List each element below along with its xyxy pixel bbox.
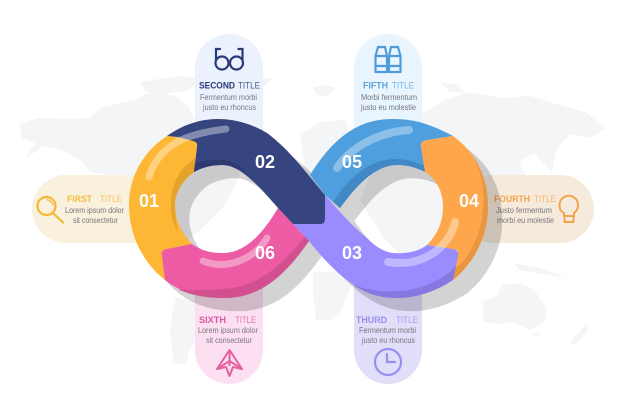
segment 02: navy <box>167 119 325 224</box>
panel: fifth title <box>354 34 422 150</box>
text: third body: Fermentum morbi <box>359 326 416 335</box>
world map background <box>20 74 606 365</box>
panel: fourth title <box>460 175 594 243</box>
icon: light bulb <box>560 196 578 222</box>
heading: second title: SECOND <box>199 80 235 90</box>
text: first body: Lorem ipsum dolor <box>65 206 124 215</box>
heading: fourth title: FOURTH <box>494 194 530 204</box>
text: third body: justo eu rhoncus <box>361 336 415 345</box>
segment 03: purple <box>293 195 458 298</box>
segment 05: blue <box>310 119 453 208</box>
icon: paper plane <box>217 350 242 376</box>
text: sixth body: Lorem ipsum dolor <box>198 326 258 335</box>
number 05: 05 <box>342 152 362 172</box>
text: fifth body: Morbi fermentum <box>361 93 417 102</box>
number 04: 04 <box>459 191 479 211</box>
segment 04: orange <box>421 136 488 280</box>
number 02: 02 <box>255 152 275 172</box>
text: sixth body: sit consectetur <box>206 336 252 345</box>
panel: third title <box>354 270 422 384</box>
panel: first title <box>32 175 172 243</box>
heading: sixth title: SIXTH <box>199 315 226 325</box>
panel: fifth title: TITLE <box>392 80 414 90</box>
panel: sixth title: TITLE <box>235 315 256 325</box>
icon: magnifier <box>38 197 63 222</box>
text: fourth body: morbi eu molestie <box>497 216 554 225</box>
segment 06: pink <box>162 208 309 298</box>
text: fifth body: justo eu molestie <box>360 103 417 112</box>
number 03: 03 <box>342 243 362 263</box>
infinity drop shadow <box>143 132 502 311</box>
text: first body: sit consectetur <box>73 216 118 225</box>
panel: third title: TITLE <box>396 315 418 325</box>
panel: second title: TITLE <box>238 80 260 90</box>
heading: first title: FIRST <box>67 194 92 204</box>
text: fourth body: Justo fermentum <box>496 206 552 215</box>
icon: clock <box>375 349 401 375</box>
segment 01: yellow <box>129 136 197 280</box>
infinity ribbon <box>129 119 488 298</box>
panel: first title: TITLE <box>100 194 122 204</box>
heading: third title: THURD <box>356 315 387 325</box>
panel: second title <box>195 34 263 150</box>
panel: sixth title <box>195 270 263 384</box>
number 06: 06 <box>255 243 275 263</box>
panel: fourth title: TITLE <box>534 194 556 204</box>
highlight strokes <box>149 129 455 264</box>
icon: binoculars <box>376 47 400 72</box>
text: second body: Fermentum morbi <box>200 93 257 102</box>
heading: fifth title: FIFTH <box>363 80 388 90</box>
text: second body: justo eu rhoncus <box>202 103 256 112</box>
icon: glasses <box>216 49 243 70</box>
number 01: 01 <box>139 191 159 211</box>
